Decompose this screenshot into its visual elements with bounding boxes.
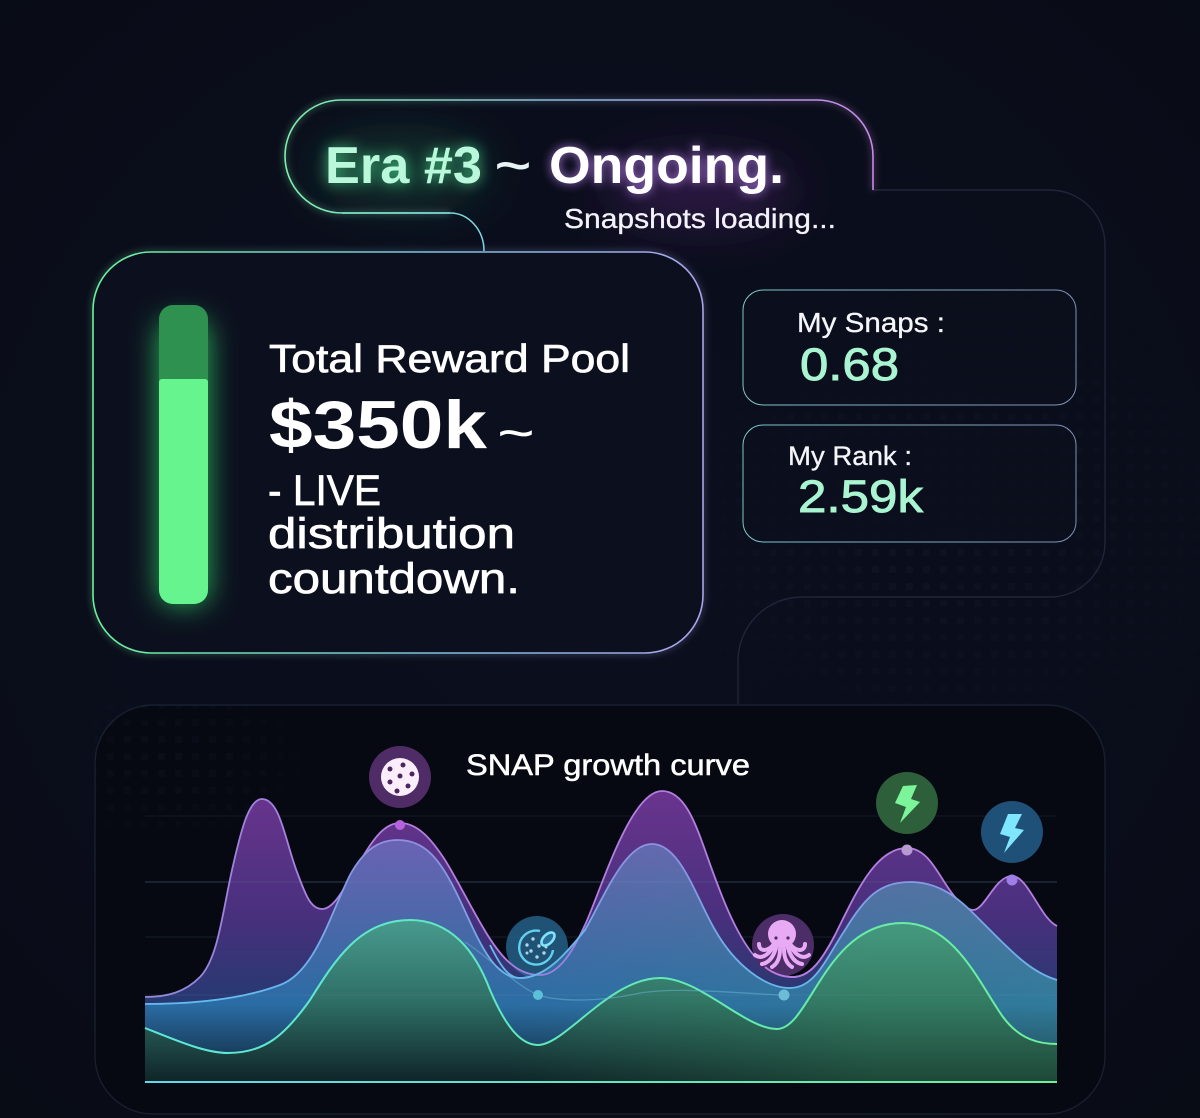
faint circuit outline: right-side connector: [738, 190, 1105, 705]
chart title: SNAP growth curve: [466, 749, 750, 782]
card: my rank: [743, 425, 1076, 542]
heading: Era #3: [325, 137, 482, 195]
data points: [395, 820, 1018, 1000]
label: Total Reward Pool: [269, 338, 630, 381]
icon: round bowl: [490, 916, 585, 978]
progress bar: [159, 305, 208, 604]
connector to reward panel: [342, 213, 484, 251]
header outline glow: [285, 100, 873, 213]
panel: snap growth curve: [95, 705, 1105, 1114]
subheading: Snapshots loading...: [564, 203, 836, 234]
panel glow: [93, 252, 703, 653]
icon: green lightning bolt: [876, 772, 938, 834]
header glow: [315, 140, 795, 222]
description: distribution: [268, 510, 515, 558]
value: ~: [498, 409, 534, 458]
panel: era header: [285, 100, 873, 251]
value: $350k: [269, 387, 487, 463]
description: [268, 467, 520, 603]
panel box: [93, 252, 703, 653]
purple series: [145, 791, 1057, 1082]
heading: Ongoing.: [549, 137, 784, 195]
rank value: 2.59k: [798, 471, 924, 522]
description: countdown.: [268, 555, 520, 603]
snaps label: My Snaps :: [797, 307, 945, 338]
snaps value: 0.68: [800, 339, 899, 390]
description: - LIVE: [268, 467, 381, 515]
header outline: [285, 100, 873, 213]
area chart: [145, 791, 1057, 1082]
baseline: [145, 1081, 1057, 1083]
icon: cookie: [369, 746, 431, 808]
panel: total reward pool: [93, 252, 703, 653]
card: my snaps: [743, 290, 1076, 405]
green series: [145, 920, 1057, 1082]
icon: octopus: [752, 914, 835, 977]
rank label: My Rank :: [788, 441, 912, 471]
icon: blue lightning bolt: [981, 801, 1043, 863]
blue series: [145, 840, 1057, 1082]
connector trend line: [465, 942, 784, 1000]
chart frame: [95, 705, 1105, 1114]
heading: [325, 137, 784, 195]
heading: ~: [495, 137, 531, 195]
